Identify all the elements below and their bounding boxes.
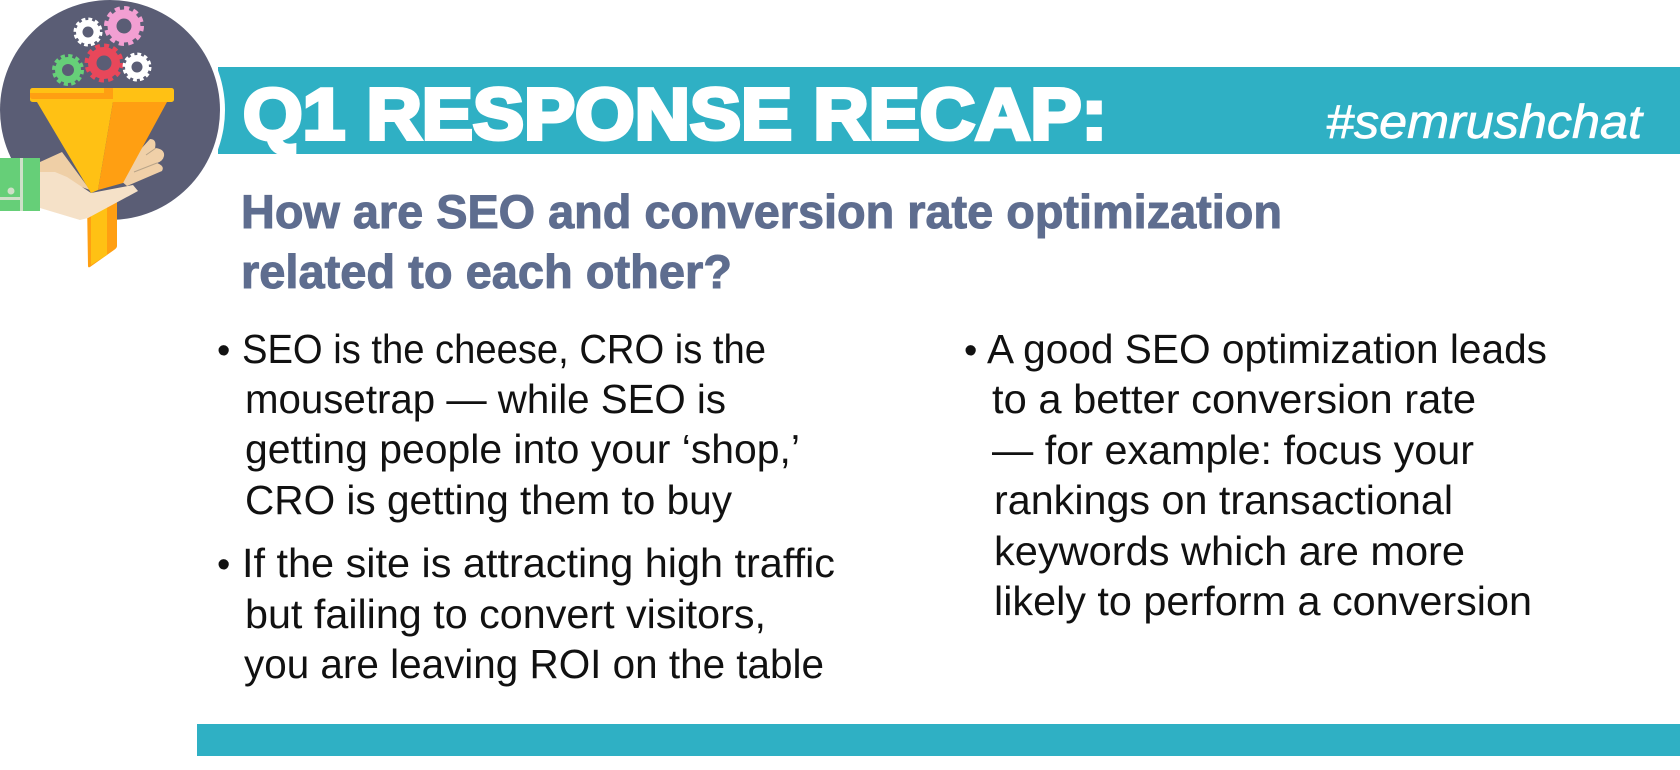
question heading: related to each other? bbox=[241, 245, 732, 298]
icon: green cuff bbox=[0, 158, 40, 211]
icon: white gear right bbox=[124, 54, 150, 80]
icon: white gear top bbox=[75, 19, 101, 45]
left column: first bullet: • bbox=[217, 330, 230, 372]
icon: palm bbox=[40, 172, 138, 220]
bottom bar bbox=[197, 724, 1680, 756]
right column: bullet: • bbox=[964, 330, 977, 372]
left column: first bullet: CRO is getting them to buy bbox=[245, 477, 732, 523]
right column: bullet: to a better conversion rate bbox=[992, 376, 1476, 422]
icon: funnel with gears and hand bbox=[0, 0, 225, 267]
icon: funnel rim bbox=[30, 88, 174, 102]
title: Q1 RESPONSE RECAP: bbox=[243, 75, 1107, 155]
icon: back of hand and fingers bbox=[40, 139, 164, 190]
left column: first bullet bbox=[217, 326, 800, 523]
left column: second bullet bbox=[217, 540, 835, 687]
right column: bullet: A good SEO optimization leads bbox=[987, 326, 1547, 372]
icon: funnel cone bbox=[37, 102, 167, 193]
icon: red gear bbox=[86, 46, 122, 80]
left column: second bullet: you are leaving ROI on the table bbox=[244, 641, 824, 687]
right column: bullet: — for example: focus your bbox=[992, 427, 1474, 473]
question heading bbox=[241, 185, 1282, 298]
left column: second bullet: • bbox=[217, 544, 230, 586]
right column: bullet: rankings on transactional bbox=[994, 477, 1453, 523]
left column: first bullet: SEO is the cheese, CRO is the bbox=[242, 326, 766, 372]
left column: first bullet: mousetrap — while SEO is bbox=[245, 376, 726, 422]
icon: pink gear bbox=[106, 8, 142, 44]
right column: bullet bbox=[964, 326, 1547, 624]
left column: second bullet: If the site is attracting high traffic bbox=[242, 540, 835, 586]
right column: bullet: keywords which are more bbox=[994, 528, 1465, 574]
left column: second bullet: but failing to convert visitors, bbox=[245, 591, 766, 637]
right column: bullet: likely to perform a conversion bbox=[994, 578, 1532, 624]
icon: green gear bbox=[54, 56, 82, 84]
question heading: How are SEO and conversion rate optimization bbox=[241, 185, 1282, 238]
header banner bbox=[218, 67, 1680, 154]
left column: first bullet: getting people into your ‘shop,’ bbox=[245, 426, 800, 472]
hashtag: #semrushchat bbox=[1326, 95, 1644, 148]
icon: funnel stem bbox=[87, 200, 117, 267]
